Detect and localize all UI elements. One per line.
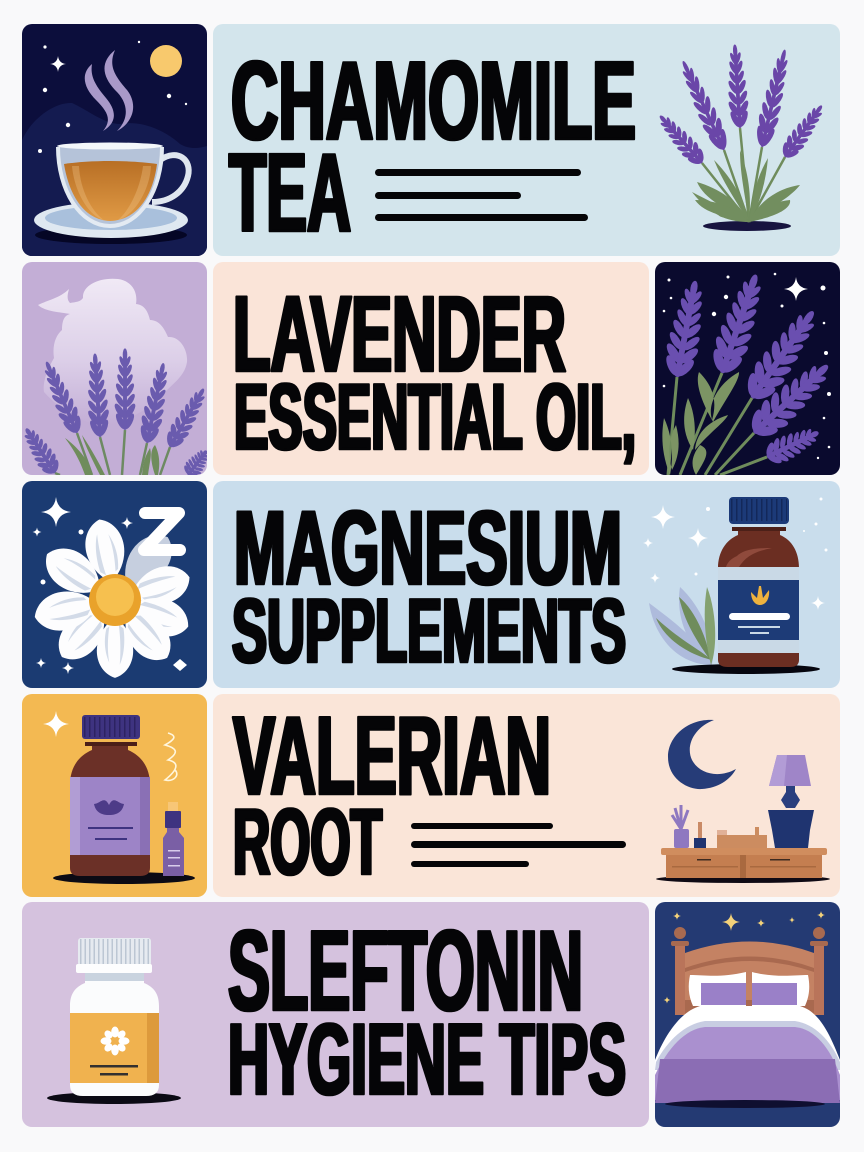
icon: sleep Z — [144, 513, 180, 550]
heading: root: ROOT — [233, 789, 382, 894]
icon: lavender plant — [652, 44, 831, 231]
text panel: lavender essential oil — [213, 262, 649, 475]
row 4: valerian root — [22, 694, 840, 897]
icon: bedside table with lamp — [656, 755, 830, 883]
heading: sleftonin: SLEFTONIN — [228, 908, 583, 1035]
icon panel: lavender sprigs at night — [655, 262, 841, 475]
text panel: chamomile tea — [213, 24, 840, 256]
icon: crescent moon — [668, 720, 736, 789]
icon: supplement bottle — [47, 938, 181, 1104]
icon: magnesium bottle — [649, 497, 820, 674]
icon panel: bed at night — [655, 902, 840, 1127]
heading: lavender: LAVENDER — [233, 273, 566, 394]
row 5: sleep hygiene tips — [22, 902, 840, 1127]
icon panel: valerian bottle — [22, 694, 207, 897]
heading: valerian: VALERIAN — [233, 694, 551, 818]
placeholder text lines — [375, 169, 588, 221]
row 3: magnesium supplements — [22, 481, 840, 688]
icon panel: lavender and cloud — [22, 262, 207, 475]
text panel: sleep hygiene tips — [22, 902, 649, 1127]
text panel: magnesium supplements — [213, 481, 840, 688]
icon panel: daisy with Z — [22, 481, 207, 688]
icon panel: tea cup at night — [22, 24, 207, 256]
row 1: chamomile tea — [22, 24, 840, 256]
heading: tea: TEA — [229, 131, 351, 255]
text panel: valerian root — [213, 694, 840, 897]
stars — [643, 498, 828, 610]
placeholder text lines — [411, 823, 626, 867]
row 2: lavender essential oil — [16, 262, 841, 482]
